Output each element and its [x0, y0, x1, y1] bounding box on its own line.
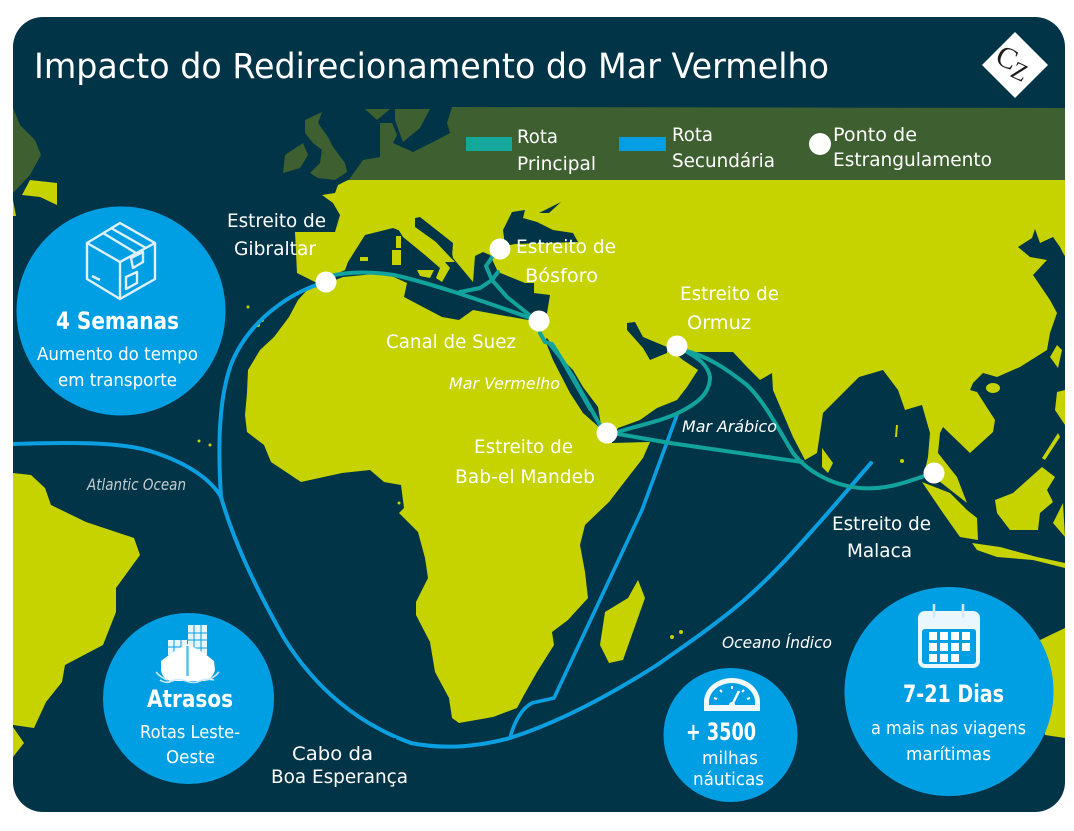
label: Ormuz: [680, 283, 779, 334]
description: Oeste: [166, 747, 215, 768]
callout: 4 semanas: [16, 206, 226, 416]
label: Gibraltar: [227, 210, 326, 260]
description: milhas: [702, 748, 758, 769]
description: [871, 718, 1026, 765]
label: Malaca: Malaca: [847, 540, 912, 562]
label: Canal de Suez: Canal de Suez: [386, 331, 516, 353]
callout: 3500 milhas: [664, 668, 798, 802]
label: Bab-el Mandeb: [455, 436, 595, 488]
icon: container ship: [156, 625, 219, 682]
legend: secondary route text: Rota: [672, 124, 713, 146]
legend: secondary route text: [672, 124, 775, 172]
label: Cabo da Boa Esperanca: Cabo da: [292, 743, 373, 765]
legend: chokepoint text: Estrangulamento: [833, 149, 992, 171]
label: Oceano Indico: Oceano Índico: [722, 633, 832, 652]
description: marítimas: [906, 744, 991, 765]
legend: main route text: Principal: [517, 153, 596, 175]
legend: main route swatch: [466, 137, 512, 151]
label: Ormuz: Estreito de: [680, 283, 779, 305]
logo: CZ diamond: Z: [1007, 57, 1032, 88]
legend: main route text: [517, 126, 596, 175]
label: Mar Vermelho: Mar Vermelho: [449, 374, 560, 393]
description: [693, 748, 764, 790]
label: Malaca: Estreito de: [832, 513, 931, 535]
description: [140, 722, 240, 768]
label: Bosforo: [516, 236, 616, 287]
label: Bab-el Mandeb: Estreito de: [474, 436, 573, 458]
label: Gibraltar: Gibraltar: [234, 238, 316, 260]
title: Impacto do Redirecionamento do Mar Vermelho: [34, 47, 829, 87]
label: Cabo da Boa Esperanca: [271, 743, 408, 788]
stat: 7-21 Dias: [903, 680, 1004, 708]
callout: atrasos: [103, 613, 274, 784]
map: Mediterranean land details: [360, 230, 455, 282]
icon: gauge: [704, 678, 760, 711]
label: Atlantic Ocean: Atlantic Ocean: [86, 475, 186, 494]
label: Ormuz: Ormuz: [687, 312, 751, 334]
label: Mar Arabico: Mar Arábico: [682, 417, 777, 436]
description: náuticas: [693, 769, 764, 790]
routes: secondary (blue): [13, 282, 871, 747]
label: Bosforo: Estreito de: [516, 236, 616, 258]
description: Aumento do tempo: [37, 344, 198, 365]
legend: main route text: Rota: [517, 126, 558, 148]
label: Malaca: [832, 513, 931, 562]
label: Cabo da Boa Esperanca: Boa Esperança: [271, 766, 408, 788]
logo: CZ diamond: C: [991, 39, 1023, 77]
callout: 7-21 dias: [844, 587, 1054, 796]
description: em transporte: [58, 370, 177, 391]
label: Bosforo: Bósforo: [525, 265, 598, 287]
logo: CZ diamond: [982, 32, 1048, 98]
legend: secondary route text: Secundária: [672, 150, 775, 172]
legend: chokepoint text: [833, 124, 992, 171]
stat: + 3500: [686, 718, 756, 746]
label: Gibraltar: Estreito de: [227, 210, 326, 232]
description: a mais nas viagens: [871, 718, 1026, 739]
stat: Atrasos: [147, 685, 233, 713]
icon: calendar: [918, 604, 980, 668]
legend: chokepoint text: Ponto de: [833, 124, 917, 146]
label: Bab-el Mandeb: Bab-el Mandeb: [455, 466, 595, 488]
stat: 4 Semanas: [56, 307, 179, 335]
legend: chokepoint dot: [809, 133, 831, 155]
routes: main (teal): [330, 250, 930, 488]
icon: box: [87, 223, 155, 299]
legend: secondary route swatch: [619, 137, 666, 151]
label background: Boa Esperanca: [394, 738, 396, 740]
description: [37, 344, 198, 391]
map: continents: [13, 180, 1065, 757]
description: Rotas Leste-: [140, 722, 240, 743]
map: seas: [318, 202, 667, 428]
chokepoints: [316, 238, 944, 484]
legend: [466, 124, 992, 175]
map: dark green northern land band: [13, 107, 1065, 193]
